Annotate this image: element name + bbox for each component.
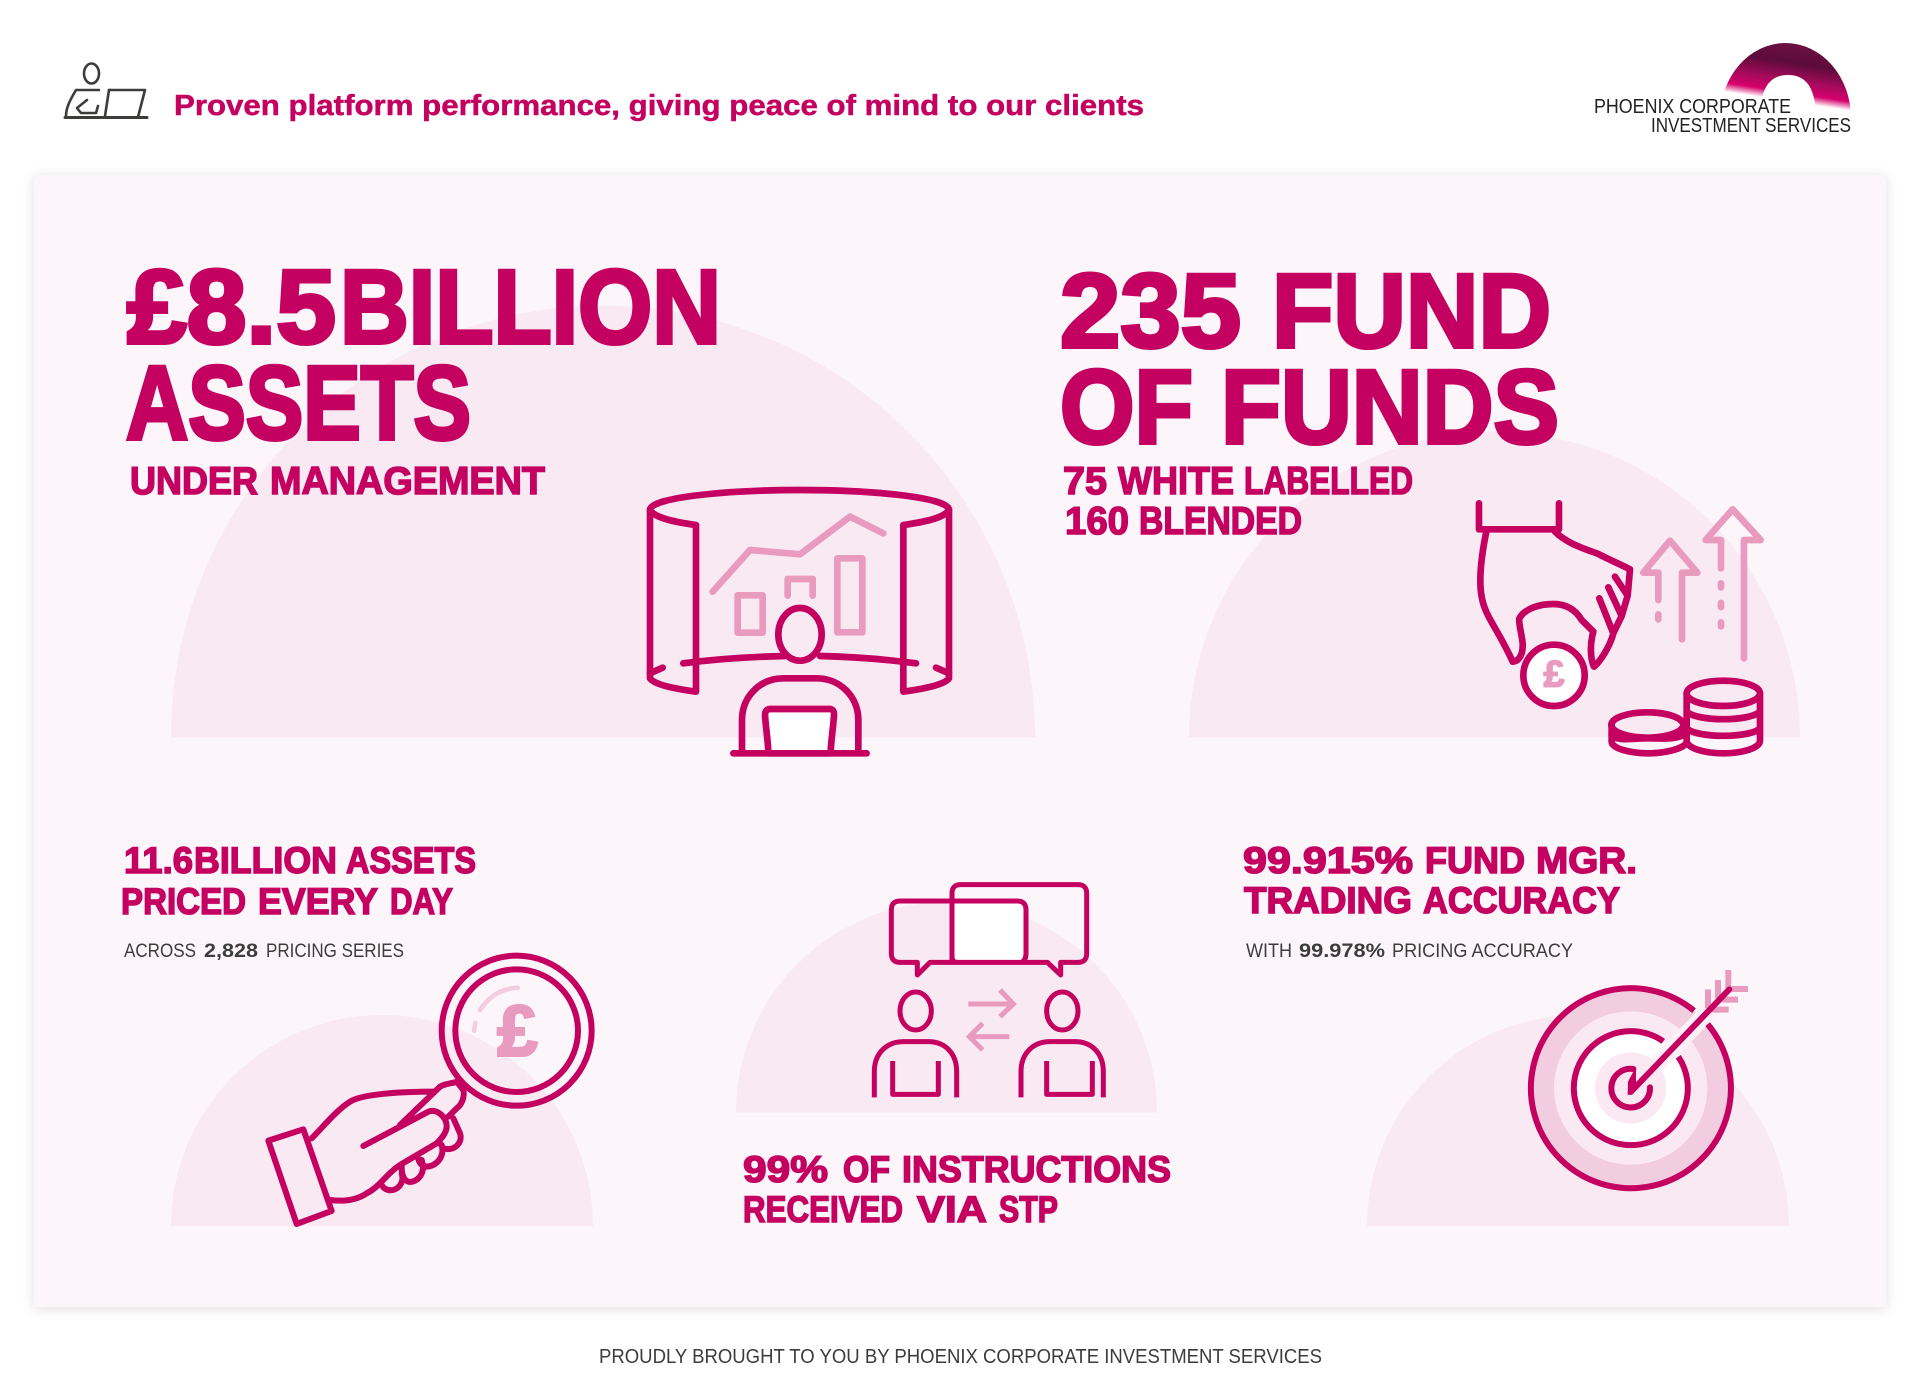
- heading: 8.5 billion assets: £8.5: [127, 249, 336, 366]
- semicircle backdrop: funds: [1189, 432, 1800, 738]
- text: with 99.978 percent pricing accuracy: PRICING ACCURACY: [1392, 941, 1573, 962]
- text: 99.915 percent trading accuracy: [1243, 840, 1637, 921]
- subheading: under management: UNDER: [130, 460, 258, 503]
- text: 11.6 billion assets priced: EVERY: [258, 881, 378, 922]
- text: 99.915 percent trading accuracy: MGR.: [1536, 840, 1637, 881]
- text: 11.6 billion assets priced: BILLION: [194, 840, 337, 881]
- text: 11.6 billion assets priced: [121, 840, 476, 922]
- icon: hand holding magnifying glass over pound: [268, 956, 592, 1224]
- icon: person viewing curved chart screen: [650, 490, 949, 753]
- icon: person at laptop: [65, 64, 147, 118]
- text: 99.915 percent trading accuracy: ACCURACY: [1423, 880, 1620, 921]
- icon: hand holding magnifying glass over pound: £: [497, 991, 537, 1071]
- text: with 99.978 percent pricing accuracy: WITH: [1246, 941, 1292, 962]
- text: with 99.978 percent pricing accuracy: [1246, 941, 1573, 962]
- text: across 2,828 pricing series: 2,828: [204, 941, 258, 962]
- heading: 8.5 billion assets: BILLION: [340, 249, 721, 366]
- text: 99.915 percent trading accuracy: TRADING: [1244, 880, 1412, 921]
- icon: hand with coin, arrows and coin stacks: [1479, 503, 1761, 753]
- subheading: white labelled and blended: LABELLED: [1244, 460, 1413, 503]
- text: 99 percent of instructions via STP: 99%: [743, 1149, 828, 1190]
- text: 11.6 billion assets priced: ASSETS: [346, 840, 476, 881]
- heading: 235 fund of funds: OF: [1060, 349, 1193, 466]
- text: 99 percent of instructions via STP: RECEIVED: [743, 1189, 903, 1230]
- panel: main background: [34, 175, 1886, 1307]
- text: across 2,828 pricing series: ACROSS: [124, 941, 196, 962]
- subheading: under management: [130, 460, 545, 503]
- text: 99 percent of instructions via STP: [743, 1149, 1171, 1230]
- text: with 99.978 percent pricing accuracy: 99.978%: [1299, 941, 1385, 962]
- semicircle backdrop: accuracy: [1367, 1015, 1789, 1226]
- logo: Phoenix Corporate Investment Services: PHOENIX CORPORATE: [1594, 95, 1791, 118]
- icon: two people exchanging speech bubbles: [874, 885, 1103, 1097]
- heading: 235 fund of funds: 235: [1060, 253, 1241, 370]
- text: 11.6 billion assets priced: PRICED: [121, 881, 246, 922]
- text: 11.6 billion assets priced: 11.6: [124, 840, 193, 881]
- page title: Proven platform performance, giving peace of mind to our clients: [174, 90, 1144, 122]
- subheading: under management: MANAGEMENT: [270, 460, 545, 503]
- text: 99 percent of instructions via STP: OF: [843, 1149, 890, 1190]
- semicircle backdrop: instructions: [736, 902, 1157, 1112]
- text: across 2,828 pricing series: [124, 941, 404, 962]
- text: across 2,828 pricing series: PRICING SERIES: [266, 941, 404, 962]
- semicircle backdrop: pricing: [171, 1015, 593, 1226]
- subheading: white labelled and blended: BLENDED: [1139, 500, 1302, 543]
- heading: 8.5 billion assets: ASSETS: [126, 345, 471, 462]
- heading: 235 fund of funds: [1060, 253, 1559, 466]
- text: 99.915 percent trading accuracy: FUND: [1425, 840, 1525, 881]
- heading: 235 fund of funds: FUNDS: [1221, 349, 1559, 466]
- text: 11.6 billion assets priced: DAY: [390, 881, 453, 922]
- semicircle backdrop: assets: [171, 306, 1035, 738]
- logo: Phoenix Corporate Investment Services: [1594, 43, 1851, 137]
- text: 99 percent of instructions via STP: STP: [999, 1189, 1058, 1230]
- text: 99.915 percent trading accuracy: 99.915%: [1243, 840, 1413, 881]
- text: 99 percent of instructions via STP: VIA: [917, 1189, 987, 1230]
- text: 99 percent of instructions via STP: INSTRUCTIONS: [902, 1149, 1171, 1190]
- icon: hand with coin, arrows and coin stacks: £: [1544, 653, 1565, 695]
- footer: PROUDLY BROUGHT TO YOU BY PHOENIX CORPORATE INVESTMENT SERVICES: [599, 1346, 1322, 1368]
- heading: 8.5 billion assets: [126, 249, 721, 462]
- logo: Phoenix Corporate Investment Services: INVESTMENT SERVICES: [1651, 114, 1851, 137]
- subheading: white labelled and blended: 75: [1063, 460, 1107, 503]
- icon: target with arrow: [1531, 970, 1748, 1188]
- subheading: white labelled and blended: 160: [1065, 500, 1129, 543]
- subheading: white labelled and blended: WHITE: [1118, 460, 1234, 503]
- subheading: white labelled and blended: [1063, 460, 1413, 543]
- heading: 235 fund of funds: FUND: [1272, 253, 1551, 370]
